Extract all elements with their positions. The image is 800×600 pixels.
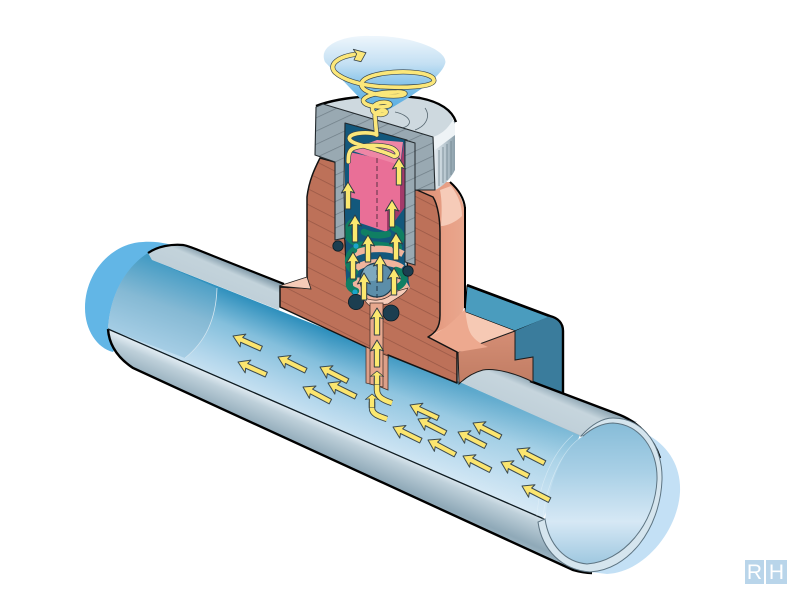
top pipe wall left bbox=[148, 245, 283, 310]
knurled skirt bbox=[433, 120, 455, 190]
discharge cone bbox=[324, 36, 445, 116]
o-rings bbox=[333, 241, 413, 321]
RH logo: R bbox=[747, 561, 762, 584]
top outline bbox=[316, 96, 456, 122]
bore seen through the right end bbox=[545, 423, 657, 564]
pink cylinder top bbox=[350, 140, 403, 167]
surface rings bbox=[395, 108, 428, 130]
fillet bbox=[428, 309, 488, 352]
ball centre line bbox=[376, 262, 378, 298]
internal cavity bbox=[345, 123, 410, 306]
ball seat bbox=[362, 288, 408, 306]
flow arrows in pipe bbox=[230, 330, 553, 506]
internal upward arrows bbox=[341, 158, 406, 367]
green band under plate bbox=[356, 241, 402, 254]
faint seam on left bbox=[185, 288, 217, 358]
pink cylinder dark side bbox=[387, 142, 405, 232]
green spring left bbox=[347, 222, 404, 291]
cyan dots bbox=[353, 243, 359, 249]
RH logo: H bbox=[769, 561, 784, 584]
right sleeve bbox=[405, 140, 415, 265]
top pipe wall outline bbox=[148, 245, 284, 284]
lower chamber salmon bbox=[352, 274, 410, 304]
lower pipe wall bbox=[108, 329, 590, 573]
interior lightening toward right end bbox=[260, 330, 580, 519]
white rim bbox=[433, 118, 455, 150]
pipe interior bbox=[108, 253, 580, 519]
faint seams on right bbox=[537, 435, 583, 519]
knurl ribs bbox=[439, 141, 451, 186]
swirl arrow bbox=[333, 49, 434, 162]
pipe end ring bbox=[538, 418, 662, 572]
cap bbox=[315, 96, 456, 265]
green spring right bbox=[394, 228, 401, 246]
cylinder centre line bbox=[376, 158, 378, 228]
left pipe opening glow bbox=[85, 242, 185, 352]
lower wall cut line bbox=[108, 329, 544, 519]
pink cylinder front bbox=[349, 152, 400, 232]
cap section bbox=[315, 104, 435, 240]
upper cavity dark bbox=[345, 123, 407, 245]
lower wall outline bbox=[108, 329, 592, 573]
top surface bbox=[323, 96, 453, 137]
tower highlight bbox=[440, 186, 462, 226]
salmon coils bbox=[352, 249, 403, 270]
fitting cross section bbox=[280, 158, 457, 383]
base top face bbox=[428, 312, 515, 352]
curved inlet arrows bbox=[365, 371, 392, 419]
fitting right body bbox=[415, 182, 533, 384]
tower side bbox=[415, 182, 465, 336]
right pipe opening glow bbox=[590, 436, 680, 574]
blue back housing bbox=[465, 285, 563, 393]
stem sleeve bbox=[366, 347, 388, 390]
right top outline bbox=[530, 381, 660, 458]
housing top face bbox=[465, 286, 550, 331]
left interior section bbox=[108, 253, 217, 358]
stem channel bbox=[370, 303, 383, 387]
base front face bbox=[458, 331, 533, 384]
cavity background bbox=[345, 140, 410, 304]
top pipe wall right bbox=[462, 358, 637, 436]
housing side face bbox=[515, 316, 563, 393]
check ball bbox=[360, 263, 394, 297]
RH logo bbox=[745, 560, 787, 584]
light fillet left bbox=[279, 277, 311, 289]
